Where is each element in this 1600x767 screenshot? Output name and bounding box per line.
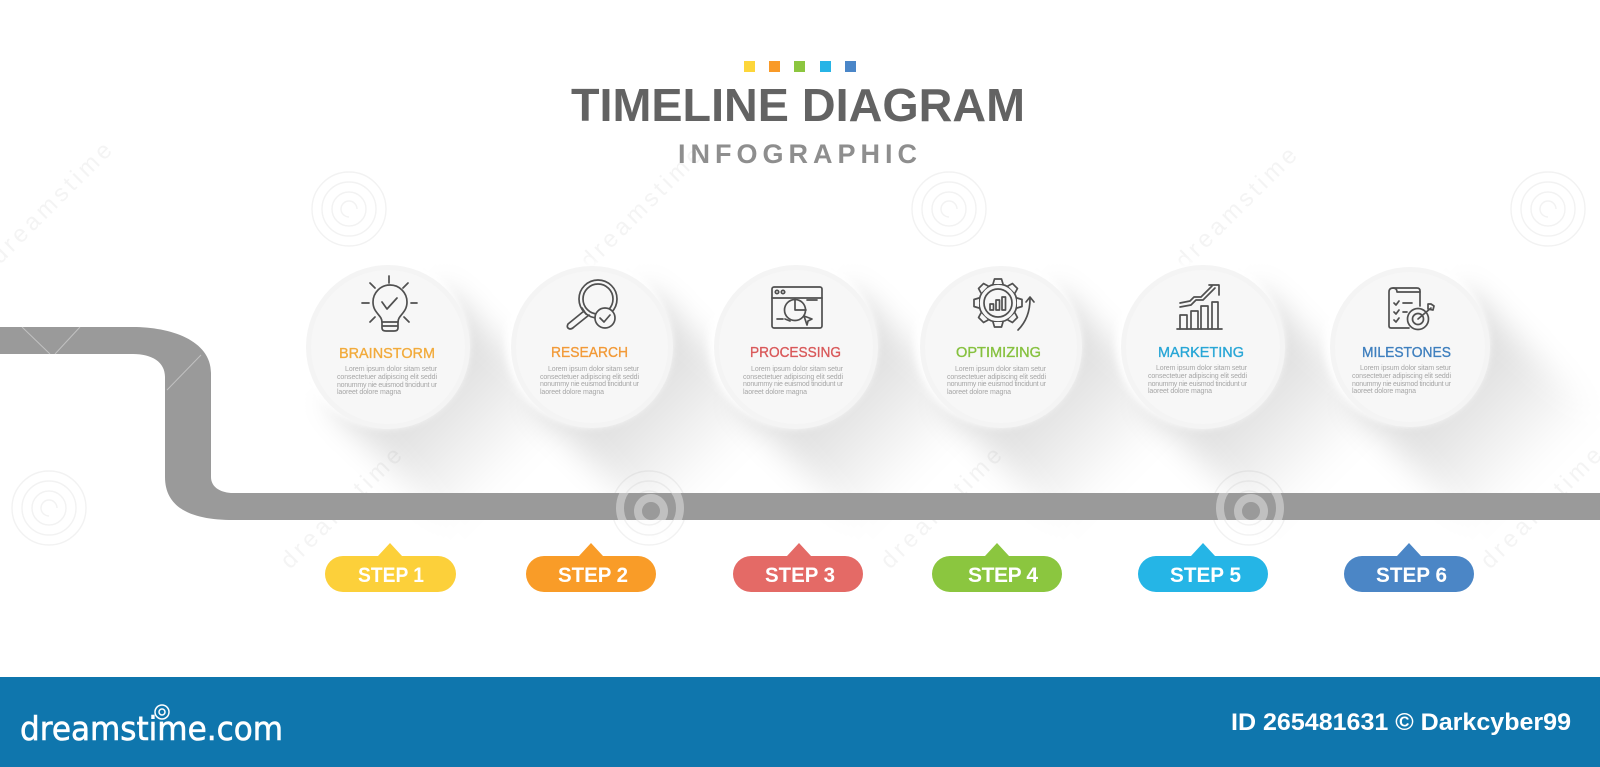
panel: research [506,261,673,428]
text block: laoreet dolore magna [540,389,604,396]
road watermark marks [22,327,1280,538]
step 6 tag [1344,543,1474,592]
text block: Lorem ipsum dolor sitam setur [955,366,1047,373]
text block: nonummy nie euismod tincidunt ur [947,381,1047,388]
heading: PROCESSING [750,344,841,361]
heading: BRAINSTORM [339,345,435,362]
text block: consectetuer adipiscing elit seddi [1148,373,1247,380]
text block: consectetuer adipiscing elit seddi [337,374,437,381]
text block: nonummy nie euismod tincidunt ur [337,382,438,389]
text block: Lorem ipsum dolor sitam setur [1360,365,1452,372]
heading: MILESTONES [1362,344,1451,361]
text block: consectetuer adipiscing elit seddi [947,374,1046,381]
subtitle: INFOGRAPHIC [678,139,917,169]
step 1 tag [325,543,456,592]
panel: marketing [1116,260,1285,429]
text block: laoreet dolore magna [743,389,807,396]
panel: milestones [1325,262,1490,427]
heading: MARKETING [1158,344,1244,361]
text block [337,366,438,396]
text block: nonummy nie euismod tincidunt ur [540,381,640,388]
step 3 tag [733,543,863,592]
logo: dreamstime.com [20,709,283,748]
icon: browser chart [772,287,822,328]
watermark pattern: dreamstime [275,442,407,574]
watermark pattern: dreamstime [1170,142,1302,274]
step 2 tag: STEP 2 [558,564,628,587]
text block [540,366,640,396]
text block [743,366,844,396]
step 4 tag [932,543,1062,592]
footer banner [0,677,1600,767]
text block [1352,365,1452,395]
text block: nonummy nie euismod tincidunt ur [743,381,844,388]
watermark pattern [0,137,1600,574]
text block [1148,365,1248,395]
text block: laoreet dolore magna [1352,388,1416,395]
panel: processing [709,260,878,429]
road [0,327,1600,520]
image id credit: ID 265481631 © Darkcyber99 [1231,709,1571,736]
text block: consectetuer adipiscing elit seddi [743,374,843,381]
step 1 tag: STEP 1 [358,564,424,587]
text block: laoreet dolore magna [337,389,401,396]
icon: gear chart [974,279,1034,330]
icon: bar chart arrow [1177,285,1222,329]
text block: nonummy nie euismod tincidunt ur [1148,381,1248,388]
heading: RESEARCH [551,344,628,361]
text block: laoreet dolore magna [947,389,1011,396]
step 2 tag [526,543,656,592]
text block: Lorem ipsum dolor sitam setur [751,366,844,373]
circle shadows [330,289,1595,532]
text block: consectetuer adipiscing elit seddi [540,374,639,381]
step 3 tag: STEP 3 [765,564,835,587]
text block: consectetuer adipiscing elit seddi [1352,373,1451,380]
icon: magnifier [567,280,617,329]
text block: Lorem ipsum dolor sitam setur [1156,365,1248,372]
text block: laoreet dolore magna [1148,388,1212,395]
text block: nonummy nie euismod tincidunt ur [1352,381,1452,388]
title: TIMELINE DIAGRAM [571,79,1025,131]
step 5 tag: STEP 5 [1170,564,1241,587]
icon: checklist target [1389,288,1434,330]
text block [947,366,1047,396]
icon: lightbulb [362,276,417,331]
step 5 tag [1138,543,1268,592]
color squares [744,61,856,72]
panel: optimizing [915,261,1082,428]
watermark pattern: dreamstime [875,442,1007,574]
panel: brainstorm [301,260,470,429]
step 4 tag: STEP 4 [968,564,1038,587]
text block: Lorem ipsum dolor sitam setur [548,366,640,373]
text block: Lorem ipsum dolor sitam setur [345,366,438,373]
watermark pattern: dreamstime [575,142,707,274]
step 6 tag: STEP 6 [1376,564,1447,587]
heading: OPTIMIZING [956,344,1041,361]
